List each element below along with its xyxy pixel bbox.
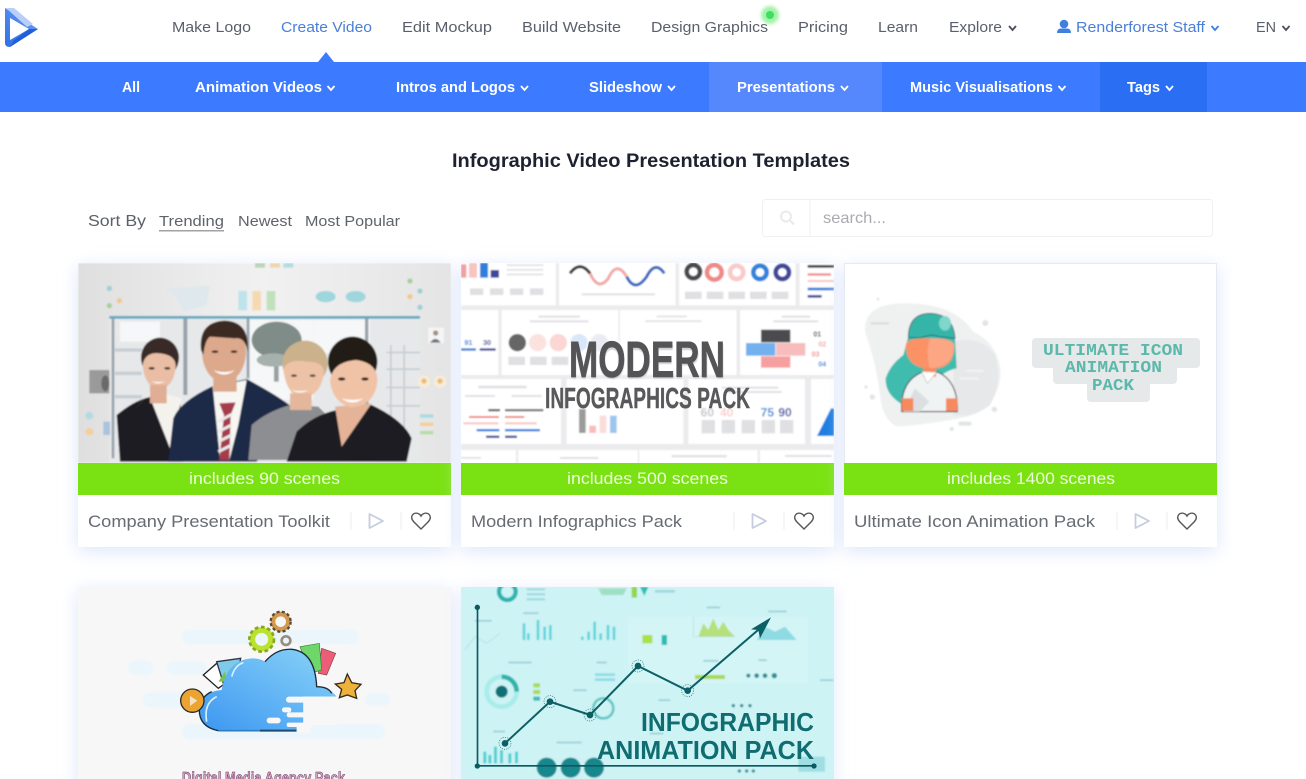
- language menu: EN: [1256, 19, 1276, 36]
- thumbnail: infographic tiles: 01: [813, 331, 821, 338]
- icon: search: [781, 212, 794, 224]
- scene count banner: [78, 463, 451, 495]
- card actions: [351, 512, 430, 530]
- thumbnail: infographic tiles: 04: [818, 361, 826, 368]
- thumbnail: infographic tiles: 60: [701, 406, 714, 420]
- thumbnail: infographic tiles: 03: [812, 351, 820, 358]
- nav: Build Website: Build Website: [522, 19, 621, 36]
- person: woman left: [117, 338, 183, 462]
- card: Company Presentation Toolkit: [78, 263, 451, 551]
- card: Ultimate Icon Animation Pack: [844, 263, 1217, 551]
- scene count banner: [844, 463, 1217, 495]
- card actions: [734, 512, 813, 530]
- language menu: [1256, 19, 1290, 36]
- sort controls: [88, 213, 400, 232]
- scene count banner: [461, 463, 834, 495]
- thumbnail badge: ANIMATION: [1065, 359, 1162, 378]
- nav: Learn: Learn: [878, 19, 918, 36]
- sort: Newest: Newest: [238, 213, 293, 230]
- icon: cloud: [199, 649, 347, 735]
- category bar: [0, 52, 1306, 112]
- thumbnail: infographic tiles: 02: [818, 341, 826, 348]
- search placeholder: search...: [823, 210, 886, 227]
- scene count banner: includes 90 scenes: [189, 469, 340, 488]
- icon: media cards: [300, 643, 336, 675]
- thumbnail: infographic tiles: [461, 263, 834, 463]
- sort label: Sort By: [88, 213, 146, 230]
- category: Tags: Tags: [1127, 79, 1160, 96]
- sort: Trending: Trending: [159, 213, 224, 230]
- icon: star: [335, 674, 361, 698]
- nav: Pricing: Pricing: [798, 19, 848, 36]
- nav: Design Graphics: Design Graphics: [651, 19, 768, 36]
- nav: Create Video: Create Video: [281, 19, 372, 36]
- thumbnail: infographic tiles: 90: [778, 406, 792, 420]
- thumbnail: infographic tiles: 40: [720, 406, 734, 420]
- data points: [502, 663, 691, 747]
- thumbnail heading line one: INFOGRAPHIC: [641, 707, 814, 737]
- thumbnail: growth chart: [461, 583, 834, 779]
- search box: [762, 200, 1212, 236]
- thumbnail title shadow: MODERN: [569, 334, 726, 389]
- icon: green gear: [249, 627, 274, 652]
- scene count banner: includes 500 scenes: [567, 469, 728, 488]
- logo: [5, 8, 38, 47]
- thumbnail: cloud illustration: [128, 612, 390, 739]
- trend arrow head: [751, 617, 771, 638]
- card title: Company Presentation Toolkit: [88, 512, 330, 531]
- category: All: All: [122, 79, 140, 96]
- icon: phone and photo: [203, 658, 241, 688]
- person: blond woman: [248, 341, 328, 460]
- category: Intros and Logos: Intros and Logos: [396, 79, 515, 96]
- category: Music Visualisations: Music Visualisations: [910, 79, 1053, 96]
- page title: Infographic Video Presentation Templates: [452, 151, 850, 172]
- category: Slideshow: Slideshow: [589, 79, 662, 96]
- thumbnail: business team: [78, 263, 451, 463]
- card: Infographic Animation Pack: [461, 583, 834, 779]
- person: man with tie: [168, 321, 289, 462]
- INFOGRAPHICS PACK heading: INFOGRAPHICS PACK: [545, 383, 750, 415]
- thumbnail heading line two: ANIMATION PACK: [597, 735, 814, 765]
- category: Presentations: Presentations: [737, 79, 835, 96]
- thumbnail: infographic tiles: 91: [464, 338, 472, 347]
- icon: small gear: [282, 636, 290, 645]
- person: woman front: [287, 337, 412, 462]
- sort: Most Popular: Most Popular: [305, 213, 400, 230]
- card title: Ultimate Icon Animation Pack: [854, 512, 1096, 531]
- thumbnail: infographic tiles: 30: [483, 338, 491, 347]
- green notification dot: [761, 6, 779, 24]
- icon: orange gear: [271, 612, 291, 632]
- card actions: [1117, 512, 1196, 530]
- nav: Explore: Explore: [949, 19, 1002, 36]
- thumbnail badge: PACK: [1092, 377, 1135, 396]
- scene count banner: includes 1400 scenes: [947, 469, 1115, 488]
- thumbnail: infographic tiles: 75: [761, 406, 774, 420]
- MODERN heading: MODERN: [569, 331, 725, 388]
- trend line: [505, 628, 760, 743]
- nav: Make Logo: Make Logo: [172, 19, 251, 36]
- nav: Edit Mockup: Edit Mockup: [402, 19, 492, 36]
- category: Animation Videos: Animation Videos: [195, 79, 322, 96]
- card: Digital Media Agency Pack: [78, 587, 451, 779]
- chart axes: [475, 605, 817, 769]
- account menu: Renderforest Staff: [1076, 19, 1206, 36]
- icon: play coin: [181, 689, 204, 712]
- top navigation: [5, 6, 1290, 47]
- card title: Modern Infographics Pack: [471, 512, 683, 531]
- thumbnail badge: [1032, 338, 1200, 402]
- thumbnail badge: ULTIMATE ICON: [1043, 342, 1183, 361]
- thumbnail: avatar illustration: [864, 298, 1001, 431]
- card: Modern Infographics Pack: [461, 263, 834, 551]
